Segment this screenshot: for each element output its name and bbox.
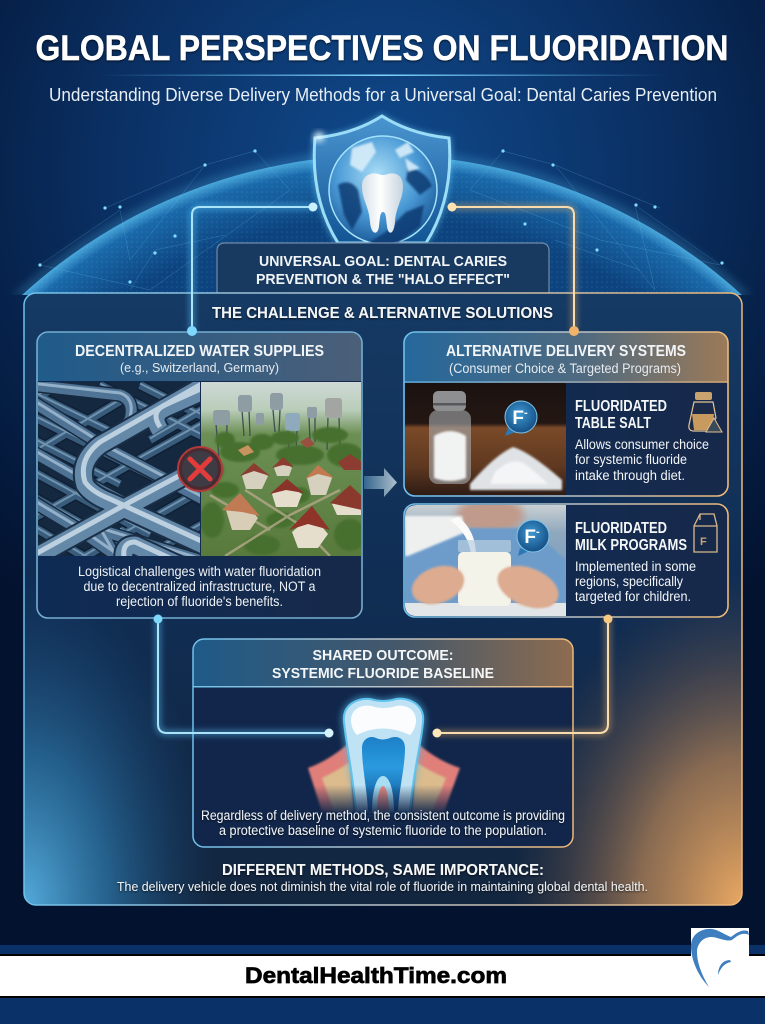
panel heading: THE CHALLENGE & ALTERNATIVE SOLUTIONS	[212, 305, 553, 322]
shared outcome heading	[272, 647, 494, 682]
icon: fluoride badge on milk	[517, 520, 549, 556]
website name: DentalHealthTime.com	[245, 963, 507, 988]
water towers	[213, 393, 342, 458]
closing heading: DIFFERENT METHODS, SAME IMPORTANCE:	[222, 862, 544, 879]
icon: fluoride badge on salt: F	[512, 408, 524, 429]
panel: decentralized water supplies	[30, 332, 366, 618]
shared outcome description: Regardless of delivery method, the consistent outcome is providing	[201, 808, 565, 823]
icon: milk carton	[694, 514, 717, 552]
panel: universal goal	[217, 243, 549, 294]
footer band	[0, 945, 765, 1024]
arrow: orange connector from globe	[448, 202, 579, 336]
icon: tooth cross-section with gums	[300, 696, 466, 815]
trees	[200, 427, 366, 555]
card heading: ALTERNATIVE DELIVERY SYSTEMS	[446, 343, 686, 360]
shared outcome description	[201, 808, 565, 838]
icon: salt shaker outline	[689, 392, 722, 432]
card text: fluoridated table salt: intake through diet.	[575, 468, 685, 483]
hands	[410, 564, 560, 610]
arrow: blue connector to shared outcome	[154, 614, 334, 738]
card text: fluoridated table salt: Allows consumer choice	[575, 437, 709, 452]
card description: due to decentralized infrastructure, NOT a	[84, 579, 316, 594]
image: tangled pipes	[38, 382, 200, 556]
image: child with glass of milk	[405, 497, 566, 617]
network globe	[12, 149, 752, 296]
panel: shared outcome	[193, 639, 573, 847]
card heading: DECENTRALIZED WATER SUPPLIES	[75, 343, 324, 360]
icon: fluoride badge on milk: F	[524, 527, 536, 548]
icon: fluoride badge on salt: -	[524, 407, 528, 419]
panel: alternative delivery systems	[404, 332, 728, 496]
shared outcome heading: SYSTEMIC FLUORIDE BASELINE	[272, 665, 494, 682]
card text: fluoridated milk programs: regions, specifically	[575, 574, 683, 589]
panel: fluoridated milk programs	[404, 497, 728, 617]
arrow: orange connector to shared outcome	[432, 614, 612, 738]
icon: fluoride badge on salt	[505, 401, 537, 436]
image: salt shaker and salt	[405, 383, 566, 495]
icon: fluoride badge on milk: -	[536, 526, 540, 538]
card text: fluoridated table salt	[575, 398, 709, 483]
card subheading: (Consumer Choice & Targeted Programs)	[449, 361, 681, 376]
shared outcome description: a protective baseline of systemic fluoride to the population.	[219, 823, 547, 838]
card description: rejection of fluoride's benefits.	[116, 594, 283, 609]
icon: milk carton: F	[700, 536, 707, 548]
card text: fluoridated milk programs	[575, 520, 696, 604]
card text: fluoridated table salt: for systemic fluoride	[575, 452, 687, 467]
card text: fluoridated milk programs: FLUORIDATED	[575, 520, 667, 537]
card text: fluoridated table salt: TABLE SALT	[575, 415, 651, 432]
universal goal line 2: PREVENTION & THE "HALO EFFECT"	[256, 271, 510, 288]
icon: red cross	[178, 447, 222, 491]
arrow: left to right	[364, 468, 397, 497]
subtitle: Understanding Diverse Delivery Methods for a Universal Goal: Dental Caries Prevention	[49, 85, 717, 105]
arrow: blue connector from globe	[187, 202, 318, 336]
logo: tooth outline	[691, 928, 749, 987]
card text: fluoridated milk programs: Implemented in some	[575, 559, 696, 574]
card description	[78, 564, 321, 609]
card text: fluoridated milk programs: MILK PROGRAMS	[575, 537, 687, 554]
image: village with water towers	[200, 382, 366, 556]
card text: fluoridated table salt: FLUORIDATED	[575, 398, 667, 415]
card description: Logistical challenges with water fluoridation	[78, 564, 321, 579]
shared outcome heading: SHARED OUTCOME:	[312, 647, 454, 664]
closing statement: The delivery vehicle does not diminish the vital role of fluoride in maintaining global dental health.	[117, 880, 648, 894]
houses	[222, 437, 362, 548]
card subheading: (e.g., Switzerland, Germany)	[120, 360, 279, 375]
universal goal line 1: UNIVERSAL GOAL: DENTAL CARIES	[259, 253, 507, 270]
card text: fluoridated milk programs: targeted for children.	[575, 589, 691, 604]
icon: shield with globe and tooth	[312, 114, 452, 244]
